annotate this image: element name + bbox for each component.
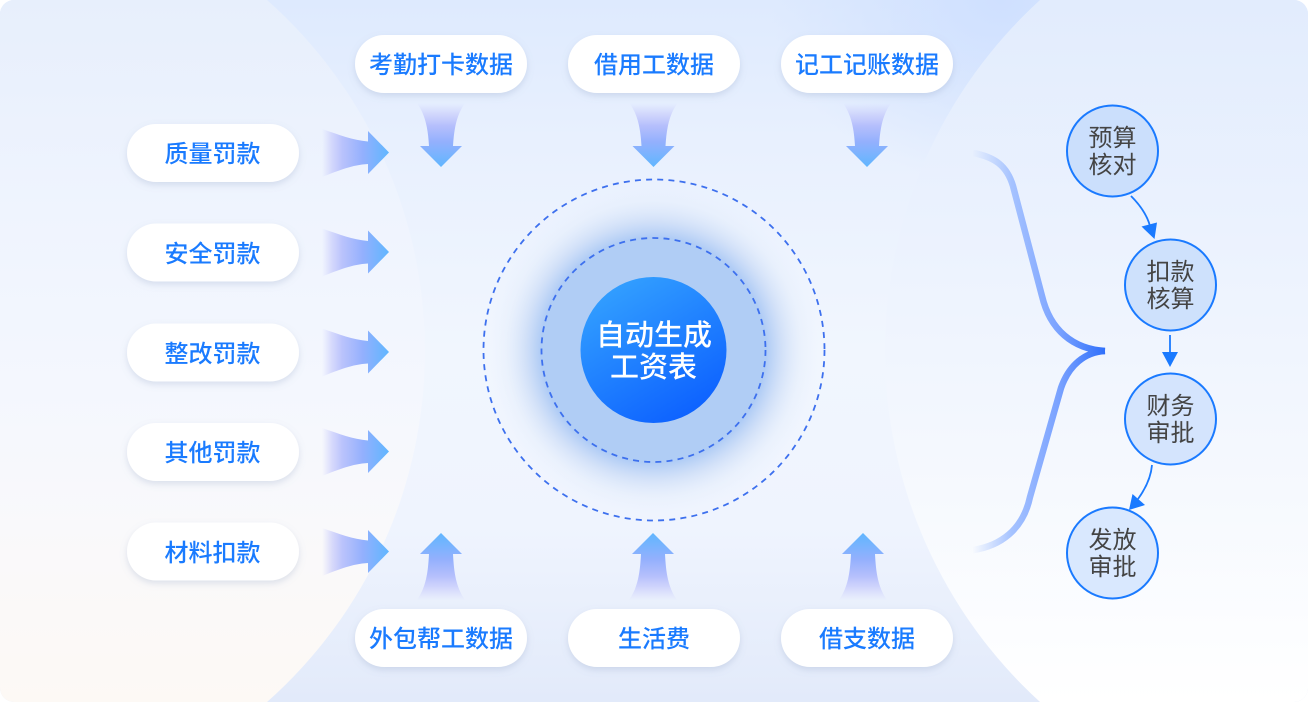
item: 借用工数据: 借用工数据: [594, 52, 714, 79]
panel: right: [885, 0, 1308, 702]
left arrows: [322, 129, 389, 576]
item: 材料扣款: [127, 522, 299, 580]
item: 材料扣款: 材料扣款: [164, 540, 260, 567]
glow: [488, 185, 818, 515]
inner dashed ring: [542, 238, 766, 462]
brace connector: [973, 153, 1105, 550]
step: 预算核对: [1067, 106, 1158, 196]
item: 整改罚款: 整改罚款: [164, 341, 260, 368]
item: 质量罚款: 质量罚款: [164, 141, 260, 168]
step: 预算核对: 核对: [1088, 152, 1136, 179]
bottom arrows: [417, 533, 887, 600]
outer dashed ring: [484, 180, 824, 520]
step: 财务审批: 审批: [1146, 420, 1194, 447]
item: 质量罚款: [127, 124, 299, 182]
bottom data items: [355, 609, 953, 667]
item: 考勤打卡数据: [355, 35, 527, 93]
approval flow: [1067, 106, 1216, 598]
step: 发放审批: 审批: [1088, 554, 1136, 581]
step: 扣款核算: 扣款: [1146, 259, 1194, 286]
panel: left: [0, 0, 425, 702]
item: 借用工数据: [568, 35, 740, 93]
left penalty items: [127, 124, 299, 580]
arrow: step 3 to 4: [1129, 465, 1152, 510]
item: 记工记账数据: 记工记账数据: [795, 52, 939, 79]
step: 财务审批: [1125, 374, 1216, 464]
item: 生活费: 生活费: [618, 626, 690, 653]
item: 其他罚款: 其他罚款: [164, 440, 260, 467]
step: 预算核对: 预算: [1088, 125, 1136, 152]
item: 外包帮工数据: 外包帮工数据: [369, 626, 513, 653]
arrow: step 1 to 2: [1131, 196, 1157, 239]
center diagram: [484, 180, 824, 520]
core circle: [580, 277, 726, 423]
item: 安全罚款: 安全罚款: [164, 241, 260, 268]
item: 生活费: [568, 609, 740, 667]
item: 外包帮工数据: [355, 609, 527, 667]
step: 发放审批: [1067, 508, 1158, 598]
item: 借支数据: 借支数据: [819, 626, 915, 653]
step: 财务审批: 财务: [1146, 393, 1194, 420]
core title: 自动生成: [596, 319, 712, 352]
item: 整改罚款: [127, 324, 299, 382]
step: 扣款核算: [1125, 240, 1216, 330]
item: 借支数据: [781, 609, 953, 667]
top arrows: [417, 103, 891, 167]
top data items: [355, 35, 953, 93]
step: 发放审批: 发放: [1088, 527, 1136, 554]
step: 扣款核算: 核算: [1146, 286, 1194, 313]
item: 安全罚款: [127, 224, 299, 282]
item: 记工记账数据: [781, 35, 953, 93]
arrow: step 2 to 3: [1162, 335, 1178, 367]
item: 考勤打卡数据: 考勤打卡数据: [369, 52, 513, 79]
item: 其他罚款: [127, 423, 299, 481]
core title: 工资表: [610, 351, 697, 384]
